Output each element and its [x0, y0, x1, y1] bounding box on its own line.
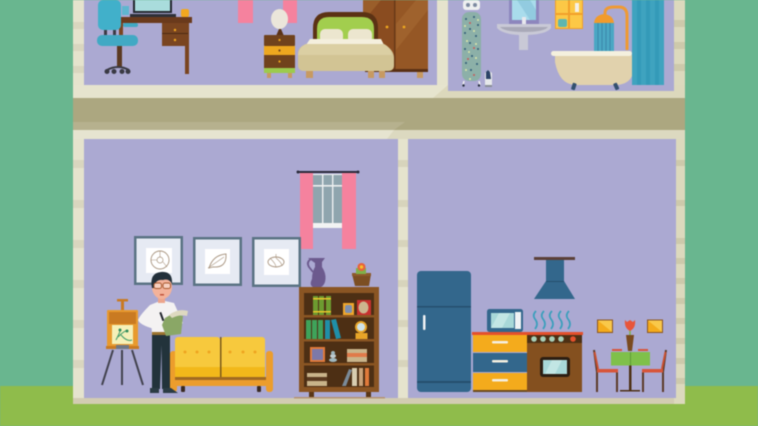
kitchen counter and drawers	[472, 332, 583, 392]
bathtub	[551, 51, 632, 90]
desk with laptop	[119, 0, 192, 74]
vase	[308, 258, 326, 287]
sink	[497, 17, 551, 50]
ironing board	[462, 0, 481, 87]
kitchen wall pictures	[597, 320, 663, 333]
sofa	[170, 337, 273, 392]
framed picture: flower	[134, 236, 183, 285]
range hood	[534, 257, 575, 299]
refrigerator	[417, 271, 471, 392]
iron	[485, 70, 492, 87]
bathroom cabinet	[555, 0, 583, 29]
dining chairs	[594, 350, 666, 392]
grass	[0, 386, 758, 426]
man with clipboard	[138, 272, 188, 393]
microwave	[487, 309, 523, 332]
room: kitchen	[408, 139, 676, 398]
window with curtains	[296, 170, 360, 249]
nightstand with lamp	[264, 9, 295, 78]
partition wall	[398, 139, 408, 398]
office chair	[97, 0, 138, 74]
house structure	[73, 0, 685, 404]
room: bathroom	[448, 0, 674, 91]
bathroom mirror	[509, 0, 539, 24]
steam	[534, 311, 570, 329]
framed picture: cotton	[252, 237, 301, 287]
shower curtain	[632, 0, 664, 85]
wardrobe	[363, 0, 428, 78]
shower	[594, 7, 627, 51]
easel	[102, 299, 143, 385]
stove oven	[527, 335, 582, 392]
room: bedroom and office	[84, 0, 437, 85]
bed	[298, 12, 394, 78]
bedroom curtains	[238, 0, 297, 23]
bookshelf	[294, 287, 385, 398]
dining table with flower	[611, 320, 650, 392]
room: living room	[84, 139, 398, 398]
framed picture: leaf	[193, 237, 242, 286]
flower pot	[352, 263, 371, 286]
